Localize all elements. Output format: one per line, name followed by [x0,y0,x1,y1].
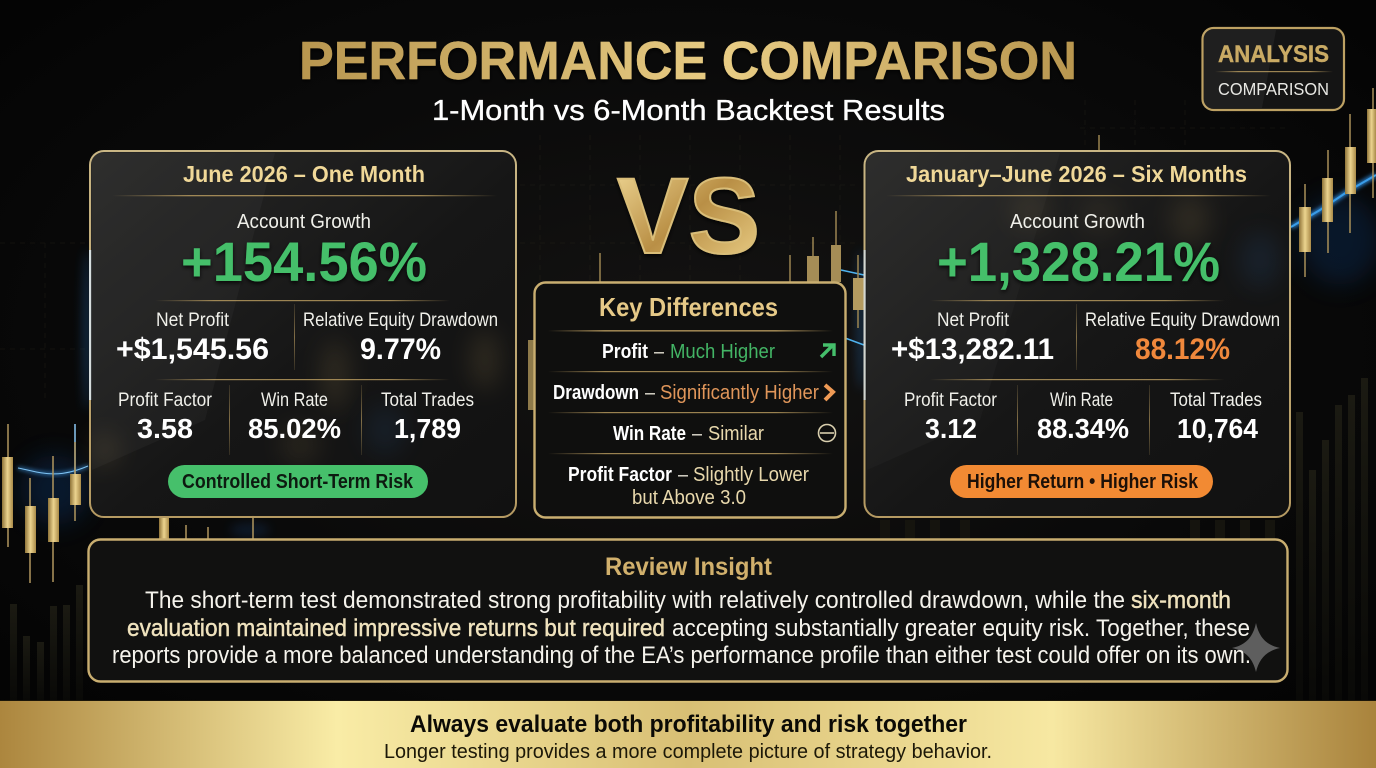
icon: neutral circle [818,424,836,442]
footer subline: Longer testing provides a more complete picture of strategy behavior. [384,741,992,763]
status pill: Higher Return • Higher Risk [967,471,1199,493]
icon: up arrow [821,345,834,357]
win rate [248,390,341,444]
panel background [89,151,516,517]
profit factor [118,390,213,444]
row: drawdown: Significantly Higher [660,382,819,404]
row: profit factor: but Above 3.0 [632,487,746,509]
relative equity drawdown [1085,310,1280,366]
account growth: +154.56% [181,230,427,293]
total trades: 10,764 [1177,413,1258,444]
win rate: Win Rate [261,390,328,411]
row: drawdown: – [645,382,656,404]
row: profit factor: – [678,464,689,486]
row: profit factor: Slightly Lower [693,464,809,486]
footer banner [0,700,1376,768]
panel: key differences [534,282,846,518]
row: profit: – [654,341,665,363]
status pill [950,465,1213,498]
row: profit: Profit [602,341,648,363]
badge: analysis comparison [1202,28,1344,110]
total trades [381,390,474,444]
row: win rate [613,423,836,445]
insight body text: accepting substantially greater equity risk. Together, these [672,615,1250,642]
row: win rate: Win Rate [613,423,686,445]
profit factor: Profit Factor [118,390,213,411]
status pill [168,465,428,498]
account growth: +1,328.21% [937,230,1220,293]
bottom volume bars left [10,585,83,700]
subtitle: 1-Month vs 6-Month Backtest Results [432,95,945,127]
row: drawdown [553,382,833,404]
profit factor: 3.12 [925,413,977,444]
profit factor: Profit Factor [904,390,998,411]
heading: June 2026 – One Month [183,161,425,187]
panel: review insight [88,540,1288,682]
profit factor [904,390,998,444]
relative equity drawdown [303,310,498,366]
bars behind panels [880,520,1275,540]
relative equity drawdown: Relative Equity Drawdown [1085,310,1280,331]
insight body text: The short-term test demonstrated strong profitability with relatively controlled drawdown, while the [145,587,1125,614]
candlesticks left [2,424,253,583]
win rate: 85.02% [248,413,341,444]
total trades [1170,390,1262,444]
insight body text: reports provide a more balanced understanding of the EA’s performance profile than either test could offer on its own. [112,642,1251,669]
account growth: Account Growth [1010,211,1145,233]
icon: sparkle [1232,623,1280,672]
candlesticks right [1299,88,1376,277]
blue glows [20,195,1376,537]
faint chart grid [0,100,1290,400]
insight body text: six-month [1131,587,1231,614]
bottom volume bars right [1296,378,1368,700]
row: profit factor [568,464,809,509]
row: win rate: – [692,423,703,445]
net profit [116,310,269,366]
heading: Review Insight [605,553,773,581]
panel: June 2026 one month [89,151,516,517]
badge: analysis comparison: COMPARISON [1218,79,1329,99]
total trades: 1,789 [394,413,461,444]
candlesticks center [528,135,1099,410]
status pill: Controlled Short-Term Risk [182,471,414,493]
win rate: 88.34% [1037,413,1129,444]
panel: January-June 2026 six months [864,151,1290,517]
profit factor: 3.58 [137,413,193,444]
blue trend lines [18,175,1376,490]
relative equity drawdown: 88.12% [1135,333,1230,366]
net profit: Net Profit [156,310,230,331]
account growth: Account Growth [237,211,371,233]
total trades: Total Trades [381,390,474,411]
net profit: +$13,282.11 [891,333,1054,366]
row: win rate: Similar [708,423,764,445]
footer headline: Always evaluate both profitability and risk together [410,711,967,738]
relative equity drawdown: Relative Equity Drawdown [303,310,498,331]
icon: chevron [825,385,833,400]
title: PERFORMANCE COMPARISON [299,31,1077,91]
win rate: Win Rate [1050,390,1113,411]
heading: January–June 2026 – Six Months [906,161,1247,187]
insight body text: evaluation maintained impressive returns but required [127,615,665,642]
win rate [1037,390,1129,444]
net profit: +$1,545.56 [116,333,269,366]
net profit [891,310,1054,366]
relative equity drawdown: 9.77% [360,333,441,366]
badge: analysis comparison: ANALYSIS [1218,41,1329,68]
net profit: Net Profit [937,310,1010,331]
row: profit factor: Profit Factor [568,464,672,486]
row: profit [602,341,834,363]
heading: Key Differences [599,292,778,322]
panel background [864,151,1290,517]
insight body text [112,587,1251,669]
row: profit: Much Higher [670,341,775,363]
VS emblem: VS [617,155,760,276]
row: drawdown: Drawdown [553,382,639,404]
total trades: Total Trades [1170,390,1262,411]
